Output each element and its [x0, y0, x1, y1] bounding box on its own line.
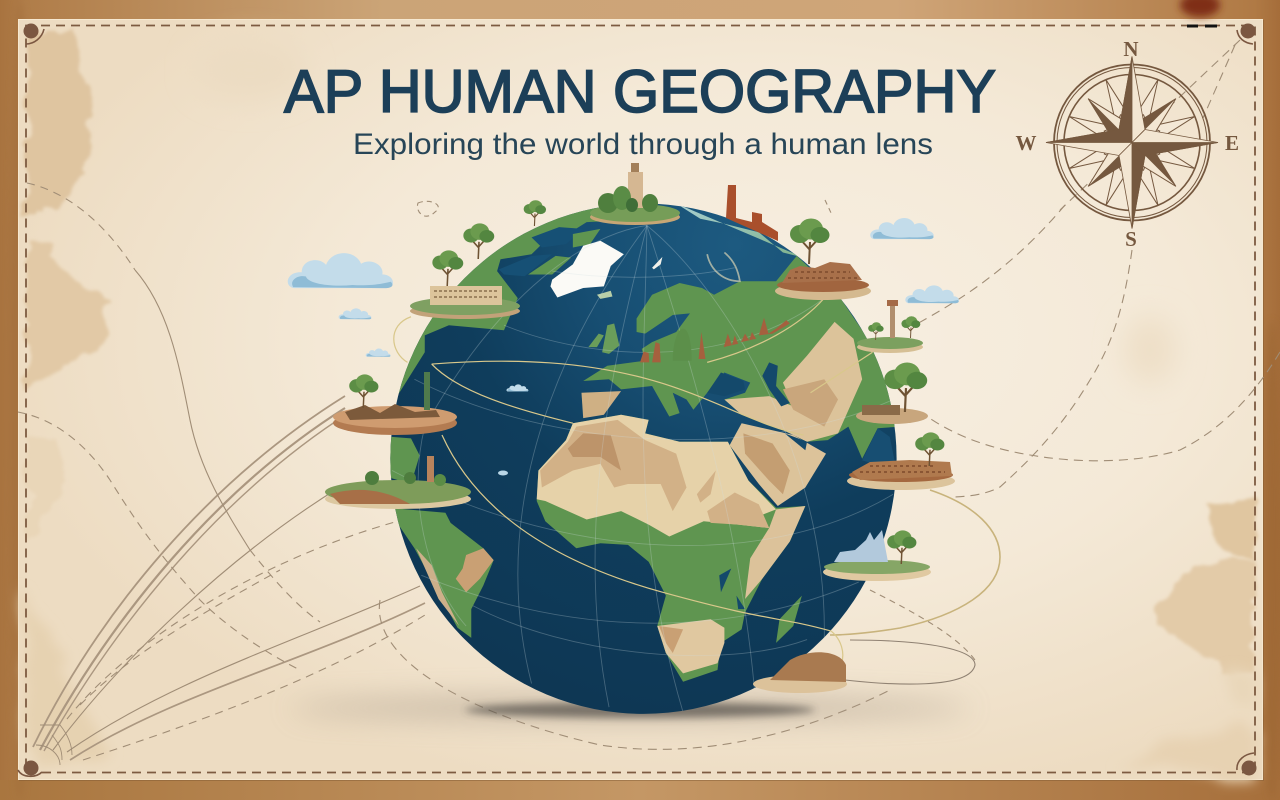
platform: southeast skyline — [823, 530, 931, 581]
sea: Caspian — [762, 362, 790, 406]
land: Central Asia tan — [783, 379, 838, 427]
land: Iberia — [581, 391, 621, 418]
trade routes across the globe — [394, 298, 872, 663]
land: Canadian islands — [528, 229, 600, 274]
land: Sahara northwest — [540, 420, 687, 511]
sea: Persian Gulf — [785, 433, 807, 450]
compass letter S: S — [1125, 227, 1137, 251]
compass letter N: N — [1123, 37, 1139, 61]
land: Greenland — [550, 241, 624, 297]
platform: southwest garden — [325, 456, 471, 509]
land: Southern Africa — [657, 619, 724, 673]
land: South America — [387, 508, 494, 638]
landmark: red castle — [726, 185, 778, 241]
platform: east observation tower — [857, 300, 923, 353]
globe — [387, 200, 900, 714]
lake: East Africa — [719, 569, 745, 609]
ocean: small cloud — [506, 384, 528, 392]
arctic coast highlight — [707, 253, 740, 281]
clouds — [288, 218, 959, 357]
land: South America desert — [456, 548, 494, 592]
sea: Black Sea — [707, 372, 744, 393]
small cloud near South Atlantic — [498, 470, 508, 476]
sea: Indian Ocean inlet — [862, 428, 894, 462]
land: Sahara — [537, 415, 776, 536]
platform: northwest palace — [410, 250, 520, 319]
land: Southern Africa dark — [659, 626, 683, 653]
compass rose — [1046, 56, 1218, 228]
graticule — [392, 225, 893, 712]
platform: top city — [590, 163, 680, 225]
land: Britain and Ireland — [588, 324, 619, 354]
land: Horn of Africa — [745, 506, 805, 599]
land: Sahara dark patch — [568, 433, 621, 471]
compass letter W: W — [1016, 131, 1036, 155]
platform: bottom village — [753, 652, 847, 693]
land: Sahara southeast — [697, 471, 769, 528]
land: Middle East steppe — [724, 322, 862, 442]
platform: east trees — [856, 363, 928, 424]
subtitle: Exploring the world through a human lens — [353, 128, 933, 161]
land: Iceland — [597, 291, 612, 299]
platform: western wooden disc — [333, 372, 457, 435]
land: North America — [398, 208, 599, 394]
platform: east market — [847, 432, 955, 490]
land: Central America — [390, 436, 420, 480]
trees above the globe — [463, 200, 546, 259]
land: Arabia dark — [743, 433, 790, 494]
platform: northeast ruins — [775, 218, 871, 300]
land: South America coast — [416, 548, 459, 626]
land: Arctic rim — [680, 206, 797, 256]
land: Arabia — [730, 423, 826, 506]
land: Svalbard — [652, 257, 662, 269]
land: Madagascar — [776, 596, 802, 643]
title: AP HUMAN GEOGRAPHY — [284, 58, 996, 125]
compass letter E: E — [1225, 131, 1239, 155]
landmarks across Europe — [640, 318, 790, 362]
globe ground shadow — [290, 697, 970, 719]
land: Africa — [537, 415, 805, 682]
land: Eurasia — [583, 256, 900, 459]
sea: Hudson bays — [499, 227, 583, 276]
